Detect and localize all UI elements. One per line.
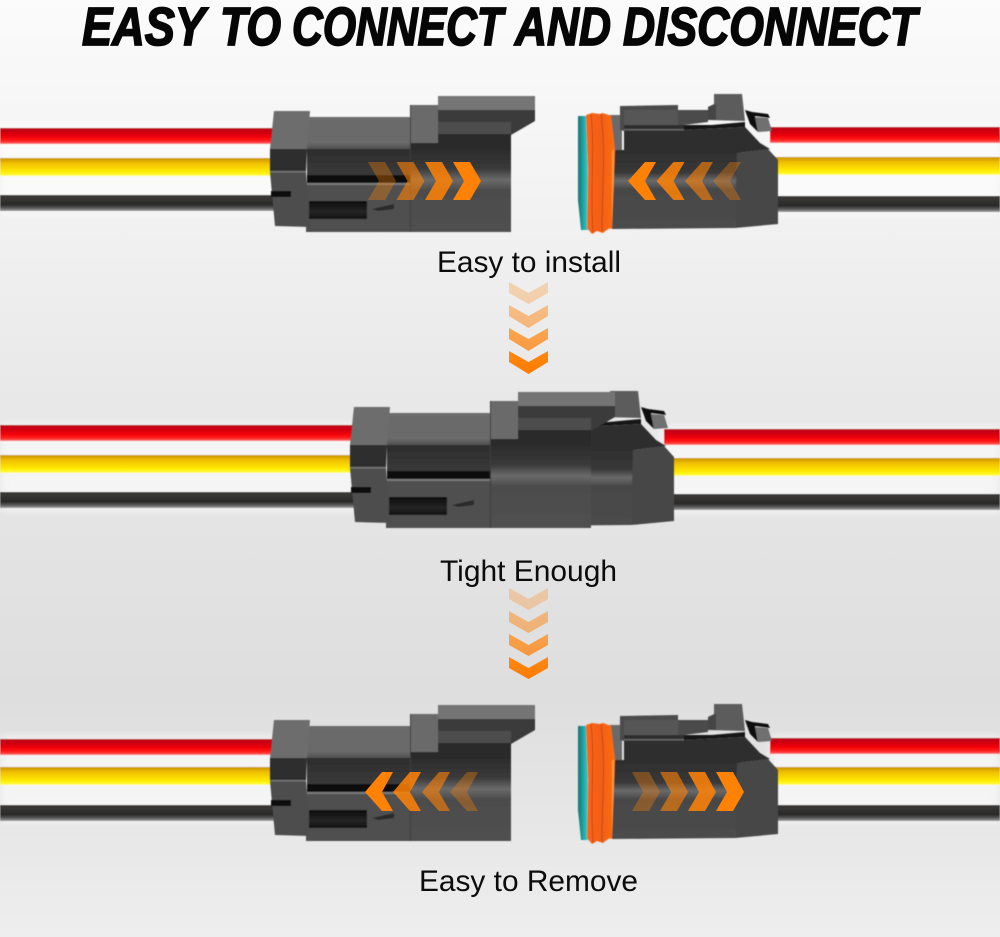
wires: left bundle, remove: [0, 736, 280, 822]
arrow: down chevrons 2: [509, 588, 548, 679]
arrows: pointing right on female connector: [632, 772, 744, 811]
wires: right bundle, install: [770, 125, 1000, 213]
label: easy to remove: Easy to Remove: [419, 865, 638, 898]
arrows: pointing left on female connector: [628, 162, 741, 200]
arrows: pointing right on male connector: [368, 162, 481, 200]
male connector, remove: [270, 705, 535, 841]
wires: left bundle, connected: [0, 423, 360, 511]
panel: remove step: [0, 704, 1000, 898]
wires: right bundle, remove: [770, 736, 1000, 822]
male connector, install: [270, 96, 535, 232]
label: easy to install: Easy to install: [437, 246, 621, 279]
wires: right bundle, connected: [660, 427, 1000, 513]
panel: install step: [0, 94, 1000, 279]
wires: left bundle, install: [0, 125, 280, 213]
joined connector: [350, 391, 674, 531]
female connector, remove: [578, 704, 778, 844]
female connector, install: [578, 94, 778, 234]
arrows: pointing left on male connector: [365, 772, 478, 811]
title: [82, 0, 920, 57]
label: tight enough: Tight Enough: [440, 555, 617, 588]
arrow: down chevrons 1: [509, 282, 548, 374]
panel: connected step: [0, 391, 1000, 588]
